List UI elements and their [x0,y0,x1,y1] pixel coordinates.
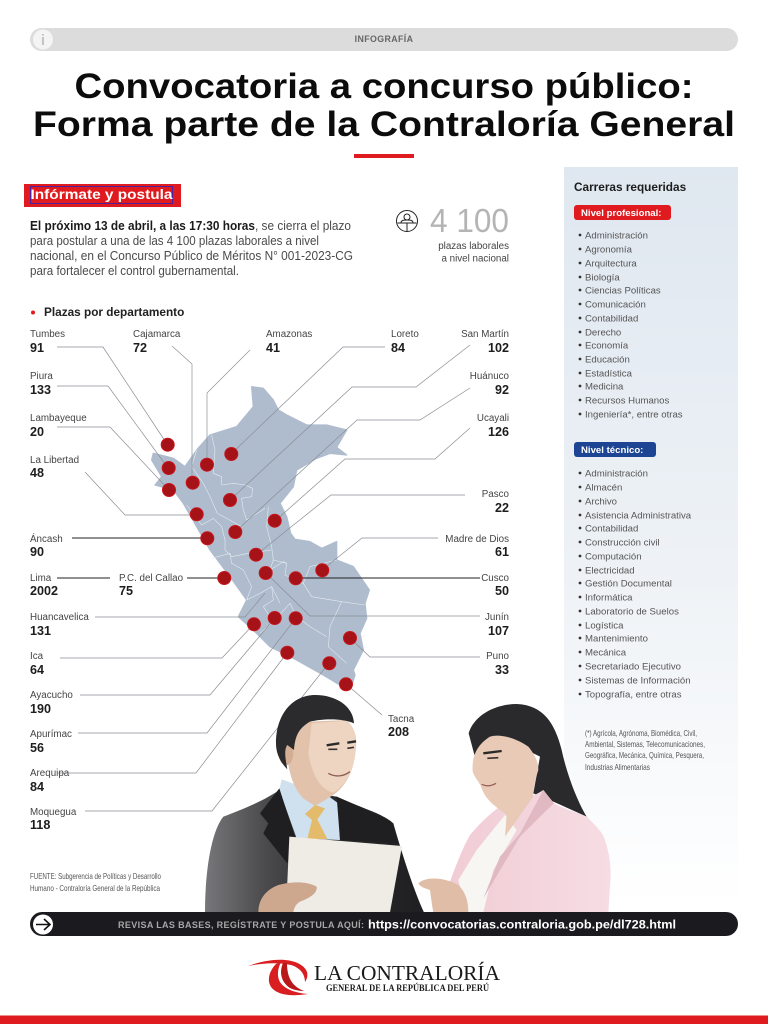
department labels: Tumbes [30,329,65,340]
department labels: Madre de Dios [445,534,509,545]
list: nivel profesional: Agronomía [585,244,633,256]
list: nivel tecnico: Administración [585,468,648,480]
icon: info [33,30,53,50]
department labels: Loreto [391,329,419,340]
title [33,67,735,144]
list: nivel tecnico: Electricidad [585,566,635,576]
department labels: 56 [30,741,44,755]
department labels: 90 [30,545,44,559]
department labels: Huánuco [470,371,510,382]
department labels: 84 [391,341,405,355]
department labels: Pasco [482,489,510,500]
department labels: 41 [266,341,280,355]
list: nivel tecnico: Topografía, entre otras [585,690,682,700]
badge: nivel profesional [574,205,671,220]
footnote [585,728,705,772]
icon: person in circle [396,210,418,232]
department labels [30,329,510,832]
logo swoosh [248,960,308,995]
department labels: Ica [30,651,44,662]
list: nivel tecnico: Gestión Documental [585,578,672,590]
stat: 4 100 plazas [396,202,509,264]
department labels: 131 [30,624,51,638]
icon: arrow [33,914,53,934]
department labels: 2002 [30,584,58,598]
footnote: Industrias Alimentarias [585,762,650,772]
list: nivel profesional: Economía [585,340,629,352]
department labels: 20 [30,425,44,439]
section tag: informate y postula: Infórmate y postula [30,187,173,202]
department labels: Cajamarca [133,329,181,340]
illustration: man with document [205,695,424,912]
department labels: Moquegua [30,807,77,818]
department labels: 64 [30,663,44,677]
heading: plazas por departamento: Plazas por departamento [44,305,184,319]
department labels: 84 [30,780,44,794]
map markers [161,438,356,691]
list: nivel tecnico: Informática [585,592,633,604]
department labels: 22 [495,501,509,515]
department labels: 91 [30,341,44,355]
intro paragraph [30,219,353,278]
department labels: Amazonas [266,329,312,340]
list: nivel tecnico: Sistemas de Información [585,676,691,686]
illustration: woman [418,704,611,912]
list: nivel profesional: Ingeniería*, entre otras [585,410,683,420]
department labels: 118 [30,818,50,832]
list: nivel tecnico [579,468,692,700]
department labels: Apurímac [30,729,72,740]
department labels: 92 [495,383,509,397]
stat caption: plazas laborales [438,241,509,252]
department labels: La Libertad [30,455,79,466]
stat caption: a nivel nacional [441,254,509,264]
footnote: Geográfica, Mecánica, Química, Pesquera, [585,750,704,760]
badge: nivel profesional: Nivel profesional: [581,208,662,219]
logo: La Contraloría [248,960,501,995]
list: nivel profesional: Medicina [585,382,624,392]
icon: info: i [41,32,45,49]
panel: carreras requeridas [564,167,738,907]
footnote: (*) Agrícola, Agrónoma, Biomédica, Civil, [585,728,697,738]
map: Peru [152,387,369,690]
cta text: REVISA LAS BASES, REGÍSTRATE Y POSTULA AQUÍ: [118,920,364,930]
department labels: Ucayali [477,413,509,424]
sidebar heading: Carreras requeridas [574,180,687,194]
department labels: 75 [119,584,133,598]
title: Convocatoria a concurso público: [74,67,694,106]
badge: nivel tecnico [574,442,656,457]
list: nivel tecnico: Mecánica [585,648,627,658]
department labels: Puno [486,651,510,662]
list: nivel tecnico: Archivo [585,496,617,508]
list: nivel profesional: Derecho [585,328,621,338]
list: nivel profesional: Comunicación [585,300,646,310]
logo subtitle: GENERAL DE LA REPÚBLICA DEL PERÚ [326,982,489,994]
department labels: 133 [30,383,51,397]
list: nivel profesional: Recursos Humanos [585,396,669,406]
department labels: P.C. del Callao [119,573,184,584]
title accent [354,154,414,158]
list: nivel profesional: Contabilidad [585,314,638,324]
department labels: 48 [30,466,44,480]
department labels: 190 [30,702,51,716]
list: nivel tecnico: Asistencia Administrativa [585,510,692,522]
department labels: Piura [30,371,53,382]
list: nivel profesional: Estadística [585,368,633,380]
list: nivel profesional: Biología [585,272,620,284]
list: nivel profesional: Arquitectura [585,258,637,270]
department labels: Áncash [30,534,63,545]
department labels: 61 [495,545,509,559]
department labels: 107 [488,624,509,638]
footer band [0,1016,768,1024]
list: nivel profesional: Ciencias Políticas [585,286,661,296]
cta url: https://convocatorias.contraloria.gob.pe/dl728.html [368,918,676,932]
intro paragraph: nacional, en el Concurso Público de Méritos N° 001-2023-CG [30,249,353,263]
department labels: Tacna [388,714,415,725]
logo wordmark: LA CONTRALORÍA [314,961,501,985]
stat number: 4 100 [430,202,509,239]
list: nivel profesional [579,230,683,420]
footnote: Ambiental, Sistemas, Telecomunicaciones, [585,739,705,749]
top bar [30,28,738,51]
list: nivel tecnico: Laboratorio de Suelos [585,606,679,618]
title: Forma parte de la Contraloría General [33,105,735,144]
intro paragraph: para fortalecer el control gubernamental. [30,264,239,278]
list: nivel tecnico: Logística [585,620,624,632]
department labels: 208 [388,725,409,739]
department labels: 50 [495,584,509,598]
leader lines [57,345,480,811]
list: nivel profesional: Administración [585,230,648,242]
source note [30,872,161,893]
list: nivel tecnico: Almacén [585,482,622,494]
department labels: 126 [488,425,509,439]
stat caption [438,241,509,264]
department labels: Lambayeque [30,413,87,424]
call to action bar [30,912,738,936]
intro paragraph: El próximo 13 de abril, a las 17:30 horas, se cierra el plazo [30,219,351,233]
list: nivel tecnico: Secretariado Ejecutivo [585,662,681,672]
section tag: informate y postula [24,184,181,207]
list: nivel profesional: Educación [585,354,630,366]
department labels: 33 [495,663,509,677]
department labels: 102 [488,341,509,355]
department labels: Junín [485,612,509,623]
badge: nivel tecnico: Nivel técnico: [581,445,643,456]
department labels: Ayacucho [30,690,73,701]
department labels: 72 [133,341,147,355]
list: nivel tecnico: Contabilidad [585,524,638,534]
bar label: INFOGRAFÍA [355,34,414,44]
department labels: San Martín [461,329,509,340]
source note: FUENTE: Subgerencia de Políticas y Desarrollo [30,872,161,881]
intro paragraph: para postular a una de las 4 100 plazas laborales a nivel [30,234,319,248]
list: nivel tecnico: Construcción civil [585,538,660,548]
list: nivel tecnico: Mantenimiento [585,634,648,644]
department labels: Cusco [481,573,510,584]
source note: Humano - Contraloría General de la República [30,884,160,893]
list: nivel tecnico: Computación [585,552,642,562]
department labels: Lima [30,573,52,584]
department labels: Arequipa [30,768,70,779]
department labels: Huancavelica [30,612,89,623]
